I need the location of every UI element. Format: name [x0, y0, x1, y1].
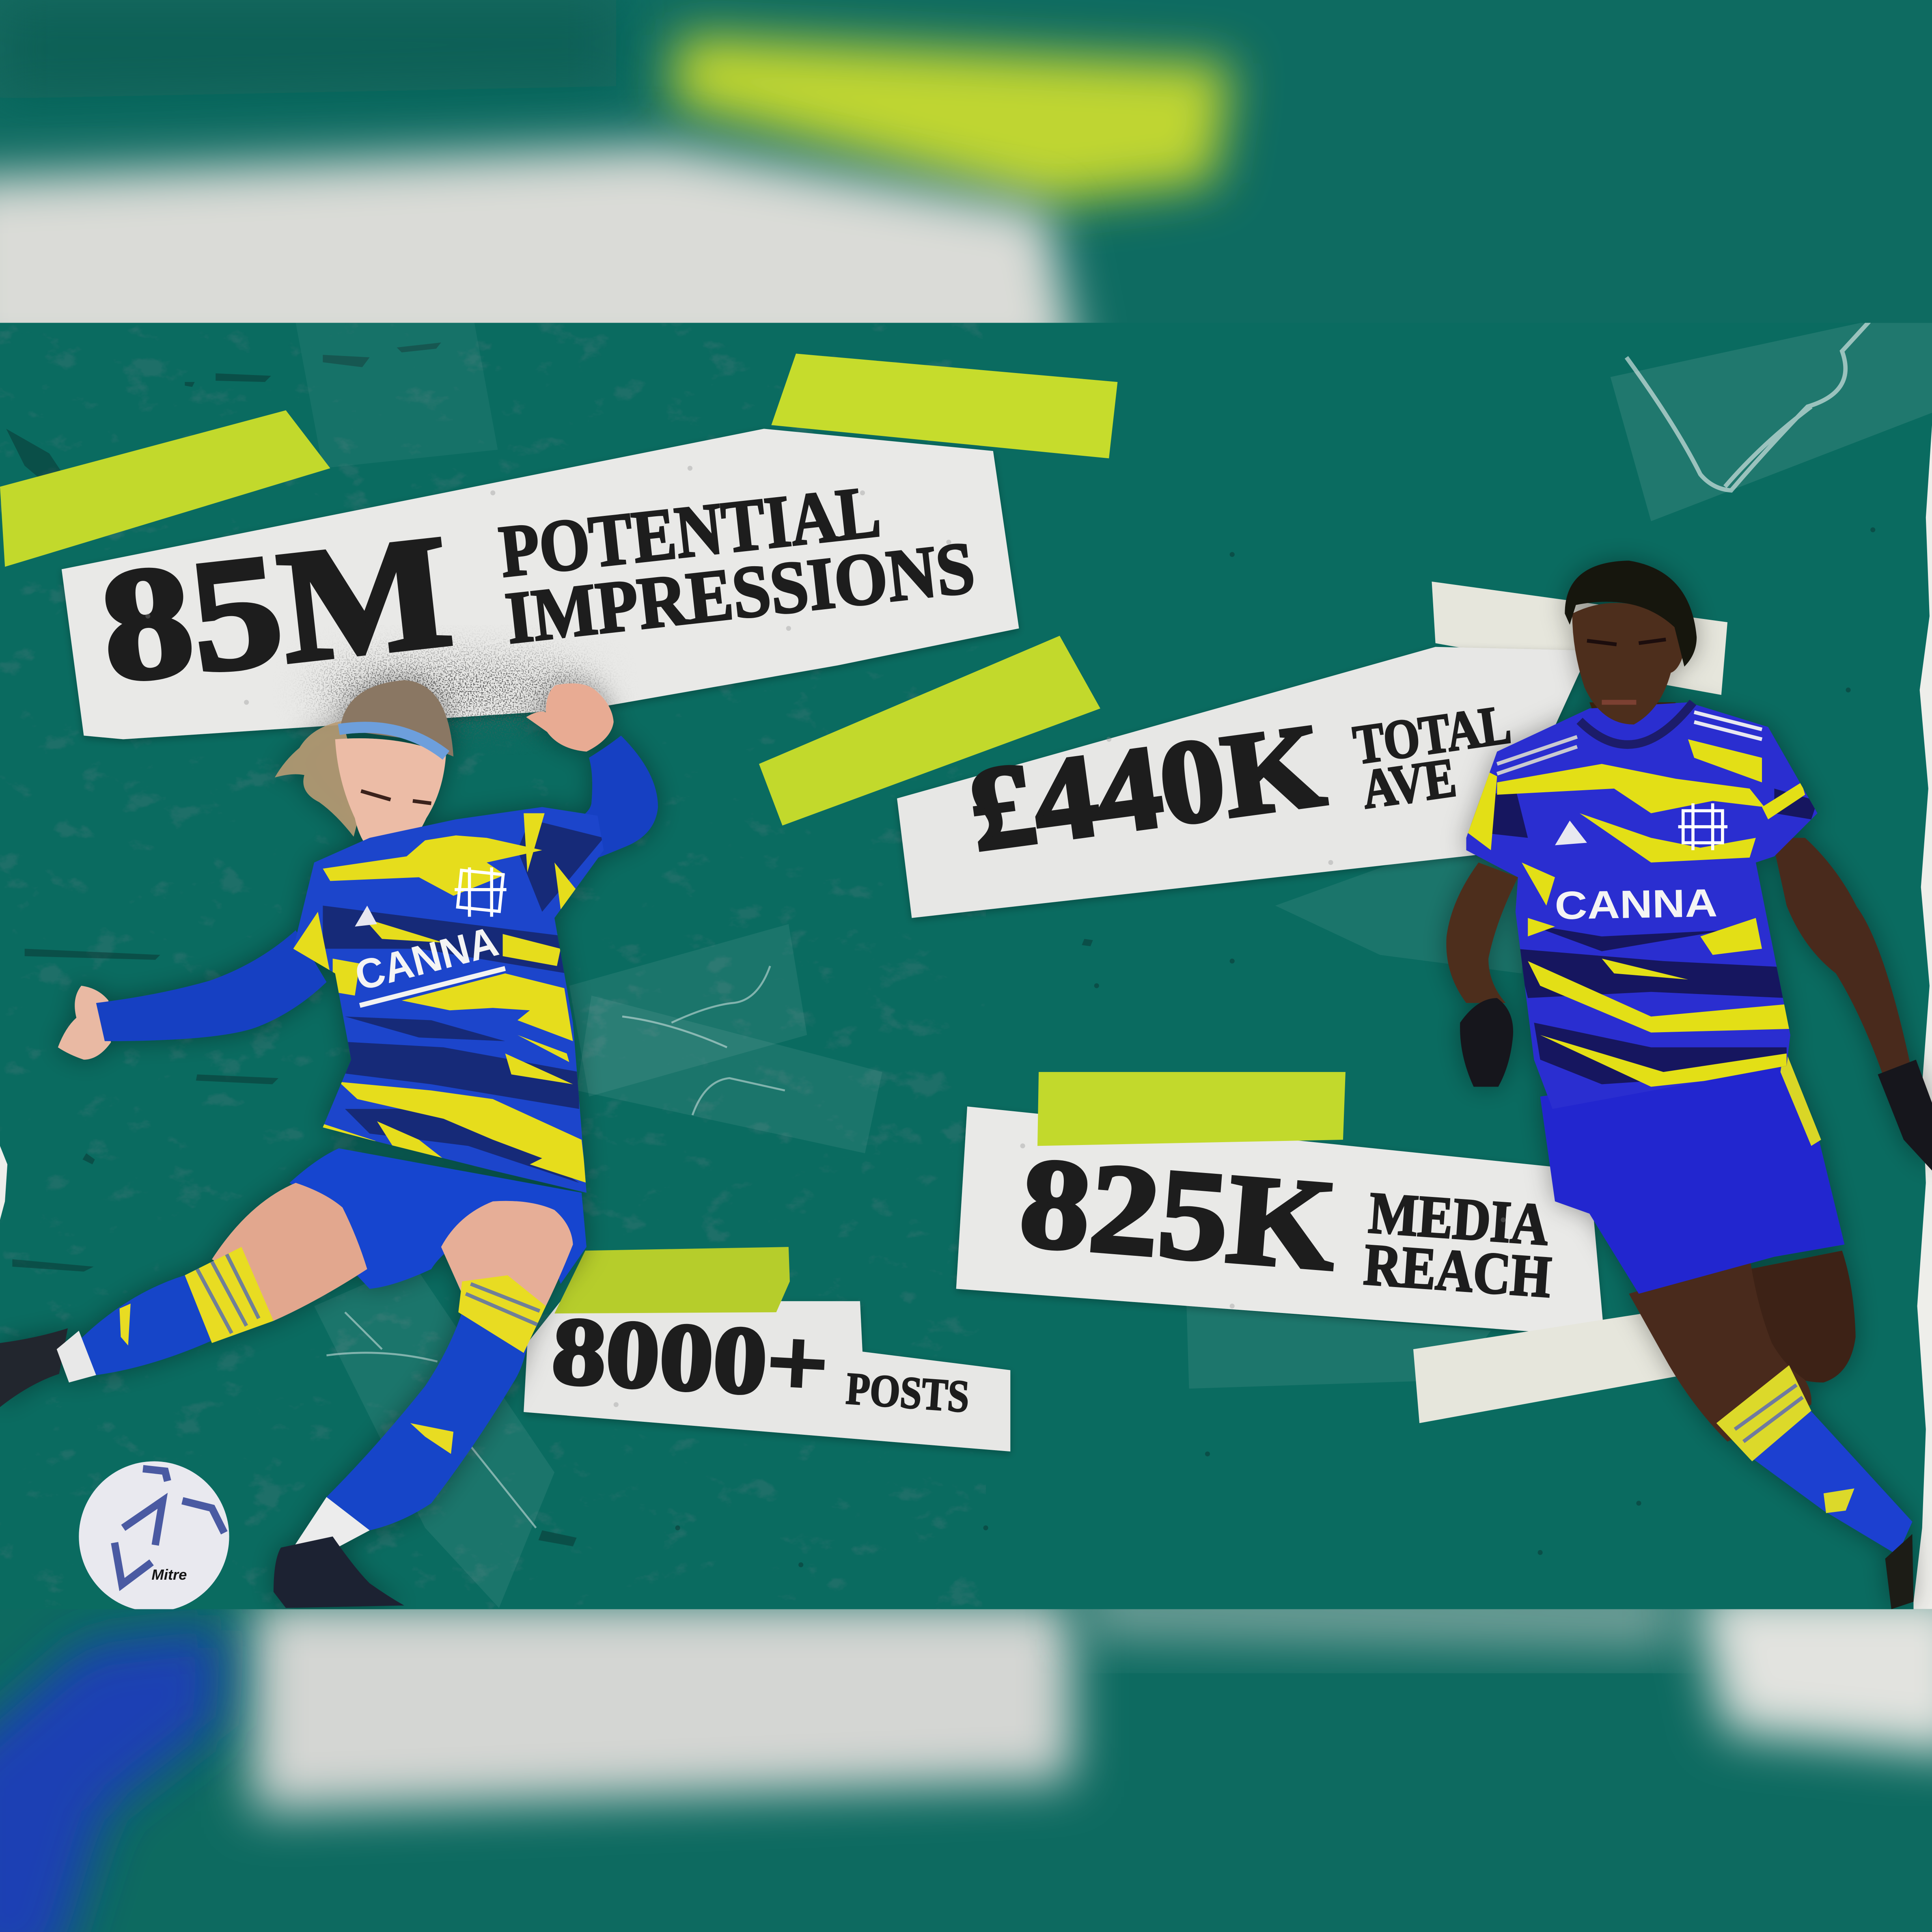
- panel: 8000+ posts: [524, 1247, 1010, 1451]
- right foot: [293, 1497, 370, 1550]
- left glove: [1460, 998, 1513, 1087]
- value 8000+: 8000+: [550, 1297, 831, 1418]
- paper: [897, 647, 1589, 918]
- right sock band: [458, 1275, 546, 1353]
- football: [79, 1461, 229, 1612]
- collar: [1580, 702, 1693, 744]
- value 85M: 85M: [93, 502, 459, 716]
- sock band: [1716, 1365, 1811, 1461]
- boot: [1885, 1534, 1913, 1609]
- torn paper right edge: [1913, 425, 1932, 1609]
- wall grunge texture: [0, 323, 986, 1609]
- shorts: [289, 1148, 586, 1289]
- torn paper left scrap: [0, 1146, 7, 1220]
- cream tape: [1432, 582, 1727, 695]
- main teal panel: [0, 321, 1932, 1612]
- value £440K: £440K: [962, 699, 1331, 876]
- left sock band: [185, 1247, 274, 1343]
- jersey dark stripes: [1466, 789, 1818, 1084]
- sponsor text: CANNA: [350, 918, 503, 999]
- crest: [1678, 803, 1727, 850]
- face: [335, 738, 446, 860]
- blurred top strip: [0, 0, 1268, 323]
- hair: [1565, 561, 1697, 666]
- shorts: [1540, 1060, 1844, 1294]
- adidas mark: [1555, 821, 1587, 845]
- label total: TOTAL: [1350, 693, 1514, 776]
- front thigh: [1629, 1257, 1811, 1442]
- clear tape top right: [1611, 321, 1932, 521]
- ponytail wisps: [275, 721, 364, 837]
- spray speckle: [314, 660, 597, 720]
- blurred bottom strip: [0, 1577, 1932, 1932]
- paper noise overlay: [145, 466, 1506, 1407]
- panel: 85M potential impressions: [0, 354, 1117, 739]
- label reach: REACH: [1362, 1231, 1553, 1310]
- shoulder stripes: [1694, 712, 1762, 739]
- paper: [524, 1301, 1010, 1451]
- hair cap: [340, 680, 453, 757]
- clear tape top left: [296, 323, 498, 468]
- clear tape behind kicker leg: [314, 1263, 554, 1608]
- raised hand: [526, 684, 614, 752]
- panel: 825K media reach: [956, 1072, 1690, 1423]
- left thigh: [212, 1183, 367, 1321]
- player: kicker, left: [0, 680, 658, 1608]
- jersey: [1466, 702, 1818, 1109]
- jersey yellow stripes: [293, 813, 586, 1183]
- right glove: [1878, 1060, 1932, 1171]
- rear leg: [1750, 1251, 1856, 1382]
- left foot: [0, 1328, 68, 1407]
- face: [1572, 603, 1683, 724]
- label AVE: AVE: [1358, 746, 1460, 820]
- jersey: [293, 807, 604, 1193]
- jersey dark stripes: [323, 819, 604, 1183]
- left hand: [58, 986, 111, 1060]
- left sock: [76, 1275, 212, 1375]
- sock: [1750, 1405, 1912, 1555]
- label impressions: IMPRESSIONS: [502, 526, 979, 659]
- panel: £440K total AVE: [759, 582, 1727, 918]
- right sock: [326, 1312, 530, 1530]
- neck: [1589, 702, 1676, 752]
- label media: MEDIA: [1367, 1179, 1551, 1258]
- paper: [956, 1106, 1604, 1337]
- value 825K: 825K: [1016, 1131, 1341, 1297]
- raised arm: [554, 735, 658, 869]
- paper: [62, 429, 1019, 739]
- adidas mark: [355, 906, 377, 927]
- label posts: POSTS: [845, 1363, 971, 1422]
- lime tape right: [771, 354, 1117, 458]
- right thigh: [441, 1201, 573, 1309]
- jersey yellow stripes: [1466, 739, 1805, 1087]
- headband: [339, 727, 446, 755]
- lime tape: [554, 1247, 790, 1313]
- right arm: [1772, 838, 1910, 1074]
- sponsor text: CANNA: [1555, 881, 1718, 928]
- lime tape: [759, 636, 1100, 826]
- lime tape: [1037, 1072, 1346, 1146]
- clear tape centre: [569, 924, 882, 1153]
- label potential: POTENTIAL: [496, 470, 884, 593]
- wall grunge marks: [6, 343, 1875, 1567]
- clear tape under AVE panel: [1275, 850, 1528, 973]
- cream tape: [1413, 1312, 1690, 1423]
- clear tape under media panel: [1186, 1306, 1491, 1389]
- ball brand: Mitre: [151, 1566, 187, 1583]
- player: runner, right: [1446, 561, 1932, 1609]
- crest: [455, 867, 507, 917]
- lime tape left: [0, 410, 330, 567]
- left sleeve: [96, 930, 326, 1041]
- left arm: [1446, 862, 1518, 1003]
